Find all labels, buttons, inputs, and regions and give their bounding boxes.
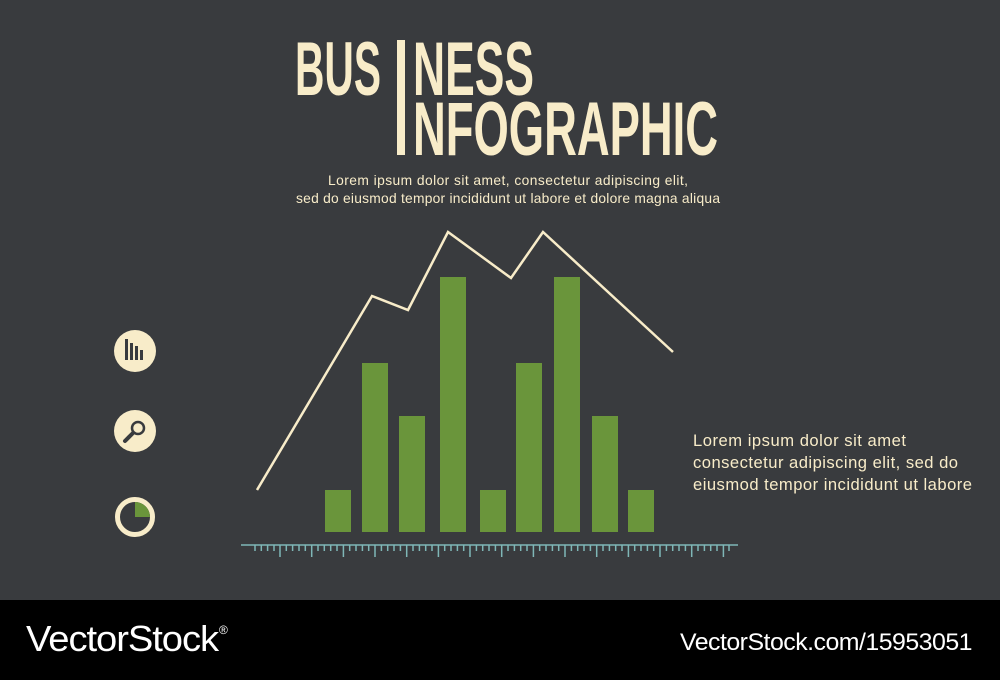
- right text block: Lorem ipsum dolor sit amet: [693, 431, 906, 450]
- subtitle: Lorem ipsum dolor sit amet, consectetur adipiscing elit,: [328, 173, 688, 188]
- line chart: [257, 232, 673, 490]
- icon: bar chart: [114, 330, 156, 372]
- icon: pie: [118, 500, 152, 534]
- footer: VectorStock.com/15953051: [680, 629, 972, 656]
- footer: VectorStock: [26, 618, 220, 659]
- title: [295, 27, 718, 172]
- icon: magnifier: [114, 410, 156, 452]
- axis ruler: [241, 545, 738, 557]
- footer: [0, 600, 1000, 680]
- title: NFOGRAPHIC: [413, 87, 718, 172]
- right text block: [693, 431, 972, 494]
- title: NESS: [413, 27, 534, 112]
- subtitle: [296, 173, 720, 206]
- subtitle: sed do eiusmod tempor incididunt ut labore et dolore magna aliqua: [296, 191, 720, 206]
- right text block: eiusmod tempor incididunt ut labore: [693, 475, 972, 494]
- right text block: consectetur adipiscing elit, sed do: [693, 453, 958, 472]
- title: BUS: [295, 27, 381, 112]
- bar chart: [325, 277, 654, 532]
- footer: ®: [219, 623, 228, 637]
